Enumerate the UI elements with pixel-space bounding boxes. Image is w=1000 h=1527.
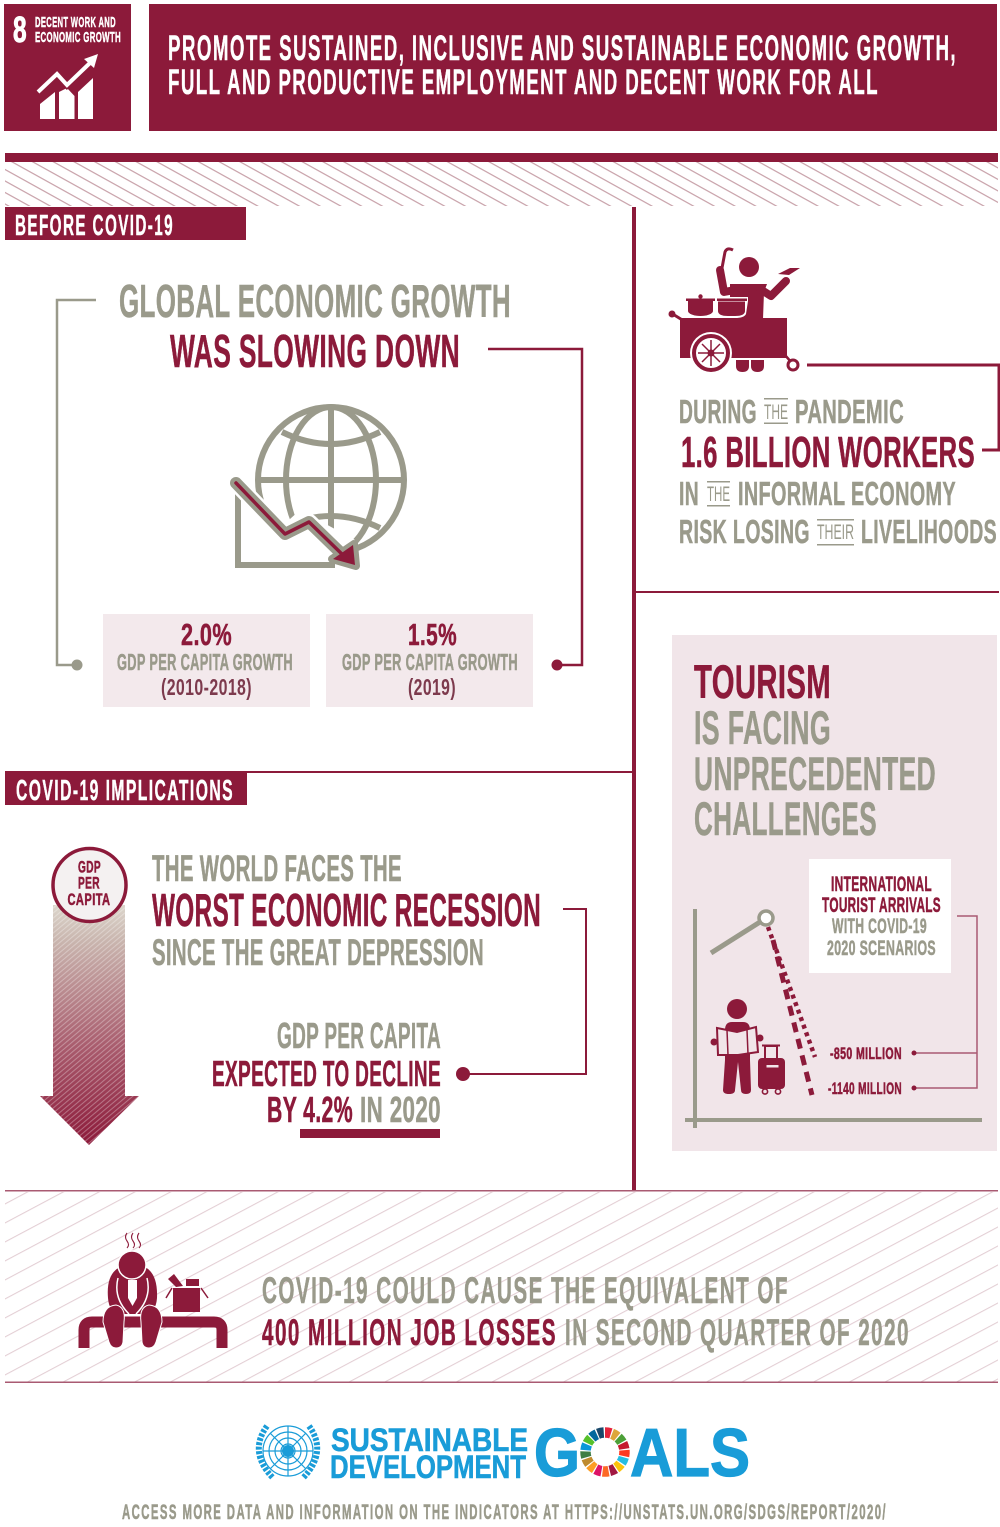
text: informal economy: IN: [679, 475, 699, 512]
heading: GLOBAL ECONOMIC GROWTH: [119, 275, 511, 327]
value labels: [828, 1045, 902, 1098]
panel: job losses: [5, 1190, 998, 1383]
logo: sustainable development goals: [259, 1415, 750, 1491]
value labels: -1140 MILLION: [828, 1080, 902, 1098]
wordmark: ALS: [630, 1415, 750, 1491]
heading: [119, 275, 511, 377]
arrow: gdp per capita decline: GDP: [78, 858, 101, 876]
stat card: 1.5%: [326, 614, 533, 707]
bracket: crimson connector: [488, 349, 582, 670]
text: informal economy: [679, 475, 956, 512]
chart: tourist arrivals scenarios: [685, 909, 982, 1128]
text: worst economic recession: THE WORLD FACES THE: [152, 848, 402, 889]
wordmark: DEVELOPMENT: [330, 1449, 526, 1485]
goal name: [35, 15, 121, 46]
bracket: grey connector: [57, 300, 96, 670]
text: during the pandemic: [679, 393, 904, 430]
text: risk losing their livelihoods: THEIR: [817, 521, 854, 544]
heading: WAS SLOWING DOWN: [170, 325, 460, 377]
text: expected to decline: EXPECTED TO DECLINE: [212, 1053, 441, 1094]
panel: informal workers: [668, 249, 999, 550]
stat card: 2.0%: GDP PER CAPITA GROWTH: [117, 649, 293, 675]
section label: covid-19 implications: [5, 772, 247, 807]
connector: [456, 909, 586, 1081]
text: informal economy: THE: [707, 483, 730, 506]
icon: tourist with map and suitcase: [710, 999, 785, 1094]
heading: TOURISM: [694, 655, 831, 708]
wordmark: G: [534, 1415, 580, 1491]
heading: IS FACING: [694, 701, 831, 754]
legend box: WITH COVID-19: [832, 915, 927, 938]
goal number: 8: [13, 9, 27, 50]
arrow: gdp per capita decline: [40, 848, 139, 1145]
text: expected to decline: [212, 1015, 441, 1138]
section label: covid-19 implications: COVID-19 IMPLICATIONS: [16, 775, 234, 807]
top band and hatching: [5, 153, 998, 206]
text: during the pandemic: DURING: [679, 393, 757, 430]
goal name: DECENT WORK AND: [35, 15, 116, 31]
text: expected to decline: GDP PER CAPITA: [277, 1015, 441, 1056]
stat card: 1.5%: 1.5%: [408, 617, 457, 652]
arrow: gdp per capita decline: PER: [78, 874, 100, 892]
stat card: 2.0%: [103, 614, 310, 707]
text: expected to decline: BY 4.2%: [267, 1089, 353, 1130]
icon: street food vendor: [668, 249, 800, 374]
panel: tourism: [672, 635, 997, 1151]
arrow: gdp per capita decline: CAPITA: [68, 891, 110, 909]
section label: before covid-19: BEFORE COVID-19: [15, 210, 174, 242]
panel: covid-19 implications: [40, 848, 586, 1145]
stat card: 2.0%: 2.0%: [181, 617, 232, 652]
callout text: 400 MILLION JOB LOSSES: [262, 1312, 557, 1353]
goal name: ECONOMIC GROWTH: [35, 30, 121, 46]
text: risk losing their livelihoods: RISK LOSING: [679, 513, 810, 550]
text: worst economic recession: SINCE THE GREAT DEPRESSION: [152, 932, 484, 973]
icon: un emblem: [259, 1426, 317, 1478]
value labels: -850 MILLION: [830, 1045, 902, 1063]
text: during the pandemic: THE: [764, 401, 788, 424]
callout text: [262, 1270, 910, 1353]
text: during the pandemic: PANDEMIC: [795, 393, 904, 430]
stat card: 2.0%: (2010-2018): [161, 674, 252, 700]
section label: before covid-19: [5, 207, 246, 242]
text: worst economic recession: [152, 848, 541, 973]
icon: globe with falling arrow: [236, 407, 404, 566]
goal badge: [4, 4, 131, 131]
title banner: [149, 4, 997, 131]
stat card: 1.5%: GDP PER CAPITA GROWTH: [342, 649, 518, 675]
wordmark: SUSTAINABLE: [331, 1422, 528, 1458]
text: worst economic recession: WORST ECONOMIC RECESSION: [152, 884, 541, 936]
heading: [694, 655, 936, 845]
connector: [807, 365, 999, 450]
stat card: 1.5%: (2019): [408, 674, 456, 700]
sdg colour wheel: [577, 1424, 633, 1480]
text: expected to decline: IN 2020: [360, 1089, 441, 1130]
connector bracket: [912, 916, 977, 1090]
icon: unemployed worker on bench: [84, 1233, 222, 1348]
icon: growth chart: [38, 54, 98, 119]
wordmark: [330, 1415, 750, 1491]
legend box: [809, 859, 951, 973]
panel: global economic growth: [57, 275, 582, 707]
text: risk losing their livelihoods: [679, 513, 997, 550]
